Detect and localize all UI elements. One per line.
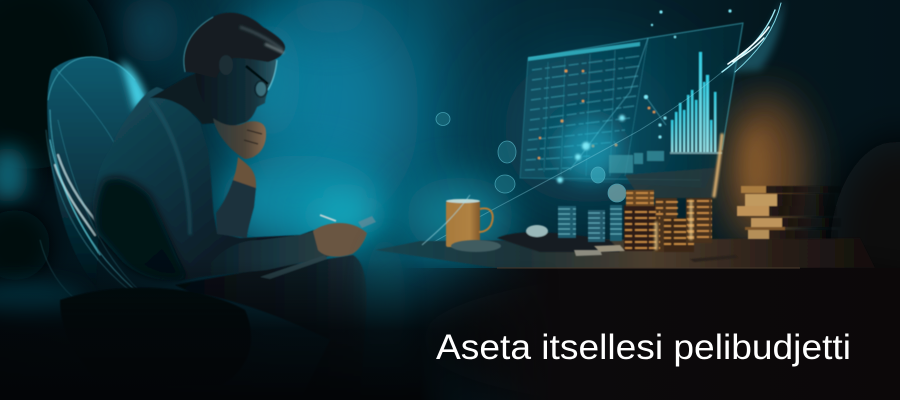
forearm on lap: [200, 228, 335, 277]
cards on desk: [574, 245, 738, 262]
floating crypto icons: [436, 112, 626, 202]
desk: [375, 238, 900, 400]
torso: [93, 87, 327, 281]
blue chip stacks: [558, 205, 622, 242]
rim light: [184, 17, 213, 72]
notebook: [260, 255, 327, 279]
holographic monitor: [520, 9, 743, 198]
coffee mug: [422, 195, 493, 247]
floor shadow: [0, 267, 498, 400]
side table glow: [365, 238, 405, 362]
monitor stand: [625, 168, 715, 198]
small widgets: [609, 151, 664, 173]
pen: [320, 215, 336, 221]
chair: [40, 56, 200, 328]
lower body: [60, 288, 251, 385]
face: [195, 52, 277, 127]
heading: Aseta itsellesi pelibudjetti: [436, 328, 851, 367]
phone: [358, 216, 376, 228]
light streak: [420, 0, 784, 250]
hair: [184, 13, 285, 78]
mouse and keyboard: [451, 225, 620, 252]
bar chart: [671, 52, 716, 152]
data table: [525, 56, 640, 170]
thigh: [175, 255, 366, 400]
shirt shadow: [95, 177, 186, 280]
writing hand: [313, 223, 367, 257]
ear: [219, 55, 233, 75]
glasses: [246, 66, 268, 84]
wrist: [233, 157, 256, 188]
orange data dots: [538, 70, 655, 159]
raised forearm: [216, 180, 256, 238]
neck: [150, 65, 232, 124]
header bar: [528, 42, 640, 61]
shirt fold highlight: [150, 100, 190, 235]
book stack: [737, 186, 841, 239]
gold coin stacks: [624, 190, 712, 252]
hand on chin: [213, 118, 266, 159]
glowing network: [560, 120, 620, 180]
screen panel: [520, 23, 743, 188]
person: [60, 13, 376, 400]
